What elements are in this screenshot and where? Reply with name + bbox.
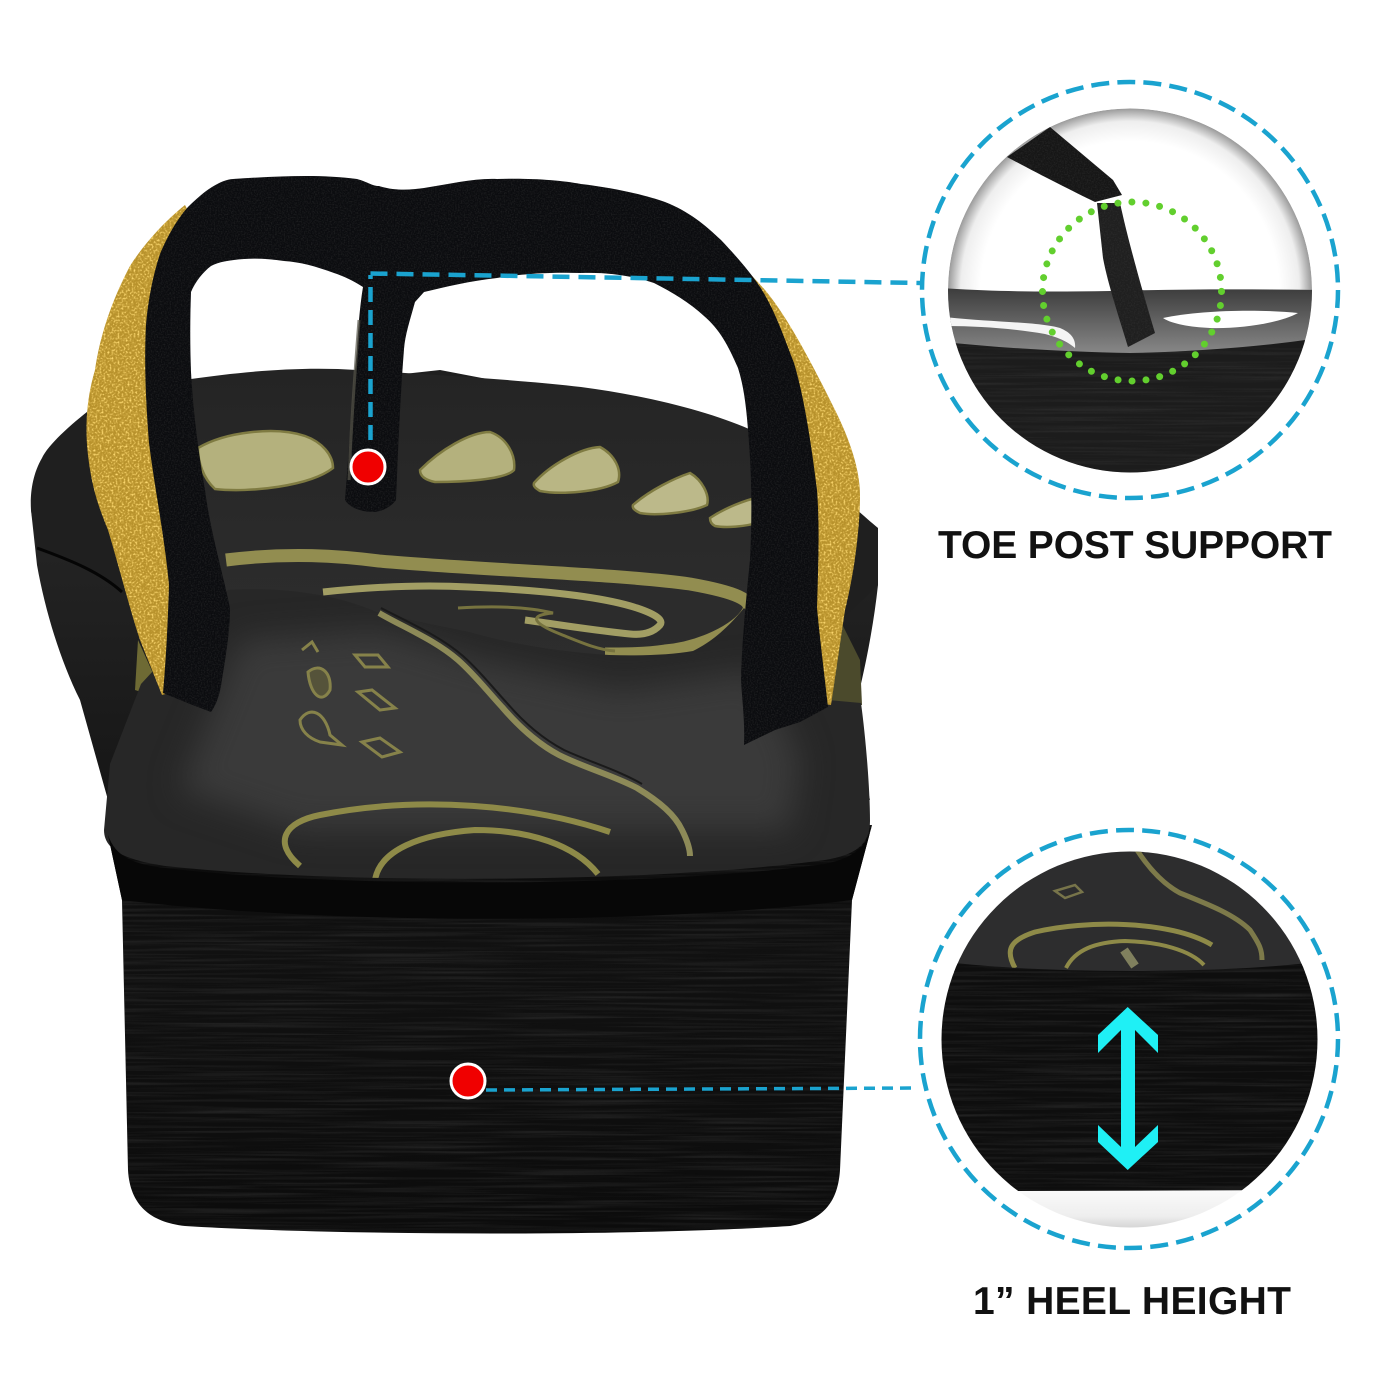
left slot opening [945, 317, 1075, 348]
island one [302, 642, 318, 652]
sole edge line [37, 548, 122, 592]
toe print: big toe [198, 431, 333, 490]
cyan height arrow [1098, 1007, 1158, 1170]
toe print: fourth toe [633, 473, 708, 514]
connector: heel to bottom circle [486, 1088, 918, 1090]
toe print: second toe [420, 432, 514, 482]
magnified toe post photo [940, 108, 1320, 480]
arch swirl outer [226, 555, 749, 654]
dashed ring top [922, 82, 1338, 498]
arch contour line [379, 613, 690, 856]
block upper band shadow [108, 825, 872, 919]
arch print: islands [300, 642, 400, 757]
island three [300, 712, 342, 745]
toe print: third toe [534, 447, 619, 493]
sole body [956, 340, 1306, 472]
heel plate [104, 589, 870, 879]
swirl inner [1066, 941, 1204, 968]
heel block [108, 825, 872, 1234]
callout circle: toe post support [922, 82, 1338, 498]
heel swirl outer [285, 804, 610, 866]
heel swirl inner [375, 830, 598, 880]
footbed surface [185, 369, 775, 760]
hotspot: heel [451, 1064, 485, 1098]
heel plate lit centre [180, 630, 800, 830]
lit area [180, 630, 800, 830]
connector vertical leg [368, 275, 373, 440]
swirl outer [1010, 924, 1212, 968]
fabric thong straps [145, 176, 828, 745]
toe post highlight [349, 320, 359, 480]
magnified heel photo [942, 852, 1318, 1228]
sandal product illustration [31, 176, 878, 1234]
logo mark [1124, 950, 1135, 966]
footbed band [940, 288, 1320, 360]
arch swirl middle [323, 586, 661, 634]
diamond three [362, 738, 400, 757]
gold glitter strap right [690, 221, 860, 705]
callout circle: heel height [920, 830, 1338, 1248]
diamond mark [1055, 885, 1082, 898]
diamond two [358, 690, 395, 710]
forefoot rim [31, 370, 878, 650]
toe print: fifth toe [710, 497, 760, 527]
toe post [1097, 203, 1155, 347]
wedge side left [31, 500, 180, 800]
arch swirl inner [458, 607, 615, 651]
strap stub [1007, 127, 1122, 202]
hotspot: toe post [351, 450, 385, 484]
wedge side right [800, 500, 878, 800]
photo backdrop [948, 108, 1312, 472]
label: heel height: 1” HEEL HEIGHT [973, 1280, 1291, 1323]
label: toe post support: TOE POST SUPPORT [938, 524, 1332, 567]
olive underside left [135, 640, 165, 700]
heel swirl group [285, 804, 610, 880]
gold glitter strap left [86, 205, 190, 695]
green dotted highlight [1042, 202, 1222, 381]
connector horizontal leg [370, 274, 920, 283]
white ground [1028, 1197, 1230, 1228]
dashed ring bottom [920, 830, 1338, 1248]
sole block [930, 962, 1330, 1191]
connector: toe post to top circle [370, 274, 920, 440]
island two [308, 668, 330, 697]
arch contour dark [381, 608, 642, 784]
diamond one [355, 655, 388, 667]
footbed [954, 852, 1305, 972]
right slot opening [1163, 311, 1298, 328]
olive underside right [830, 610, 862, 705]
arch curve [1137, 850, 1262, 960]
